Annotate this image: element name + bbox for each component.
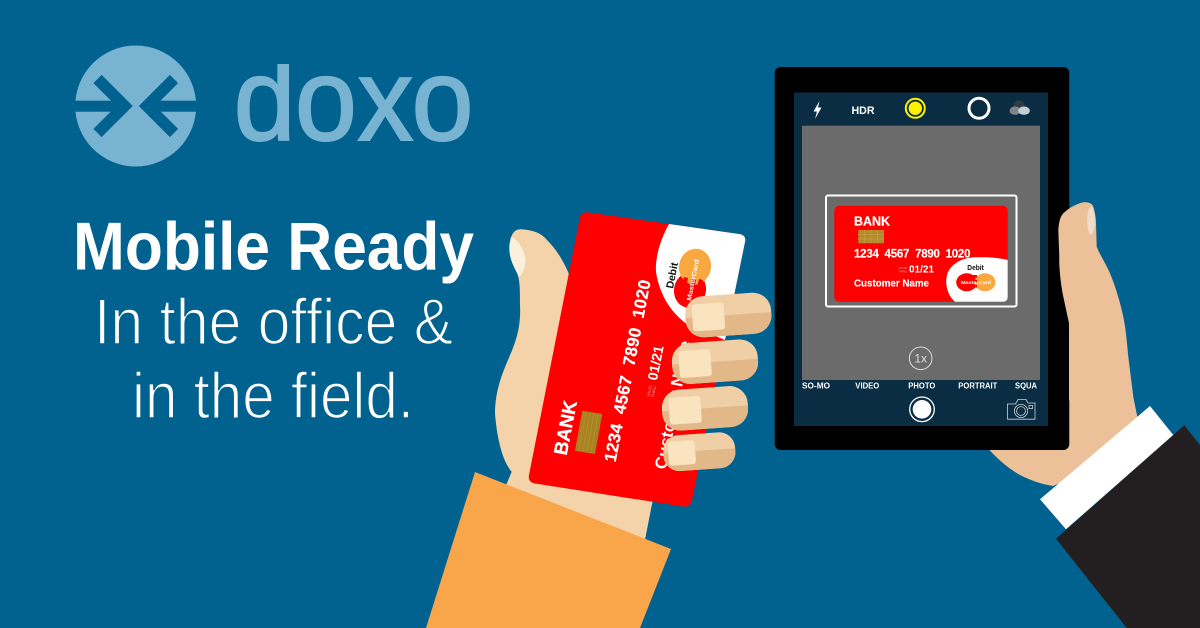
scanned card number: 1234 4567 7890 1020: [854, 248, 970, 260]
thumbnail: [509, 237, 526, 277]
icon: timer ring: [969, 98, 989, 118]
camera modes: SQUA: [1015, 381, 1037, 390]
white card corner: [656, 224, 745, 340]
icon: filters: [1010, 100, 1030, 115]
card body: [529, 212, 745, 507]
little finger: [662, 431, 736, 472]
chip: [575, 411, 602, 454]
scanned debit label: Debit: [967, 263, 984, 272]
doxo logo: [70, 35, 473, 166]
icon: flash: [814, 101, 822, 119]
tablet body: [775, 67, 1069, 450]
left hand holding card: [495, 229, 680, 545]
icon: camera: [1008, 400, 1035, 419]
camera viewfinder: [802, 126, 1040, 380]
fingers: [661, 292, 773, 472]
scan frame: [826, 196, 1016, 306]
debit label: Debit: [664, 261, 681, 290]
thumb shape: [1058, 202, 1137, 445]
expiry date: 01/21: [644, 344, 667, 382]
valid thru: VALID: [646, 385, 653, 397]
logo wordmark: doxo: [234, 35, 473, 166]
scanned valid thru: [898, 266, 908, 274]
camera modes: [802, 381, 1037, 390]
subheading line 1: In the office &: [94, 285, 453, 358]
scanned valid thru: THRU: [898, 270, 907, 274]
right thumb: [1058, 202, 1137, 445]
scanned network logo: [956, 273, 996, 291]
scanned chip: [858, 230, 884, 243]
scanned valid thru: VALID: [898, 266, 908, 270]
zoom indicator: 1x: [914, 352, 927, 366]
headline: Mobile Ready: [73, 208, 474, 284]
card network logo: [671, 246, 714, 311]
tablet screen: [794, 92, 1048, 426]
scanned expiry date: 01/21: [909, 265, 934, 276]
bank name: BANK: [551, 399, 582, 457]
valid thru: THRU: [650, 386, 657, 398]
customer name: Customer Name: [651, 339, 695, 471]
tablet: [775, 67, 1069, 450]
camera modes: VIDEO: [855, 381, 879, 390]
ring finger: [661, 385, 749, 432]
scanned card body: [834, 206, 1008, 302]
camera modes: PORTRAIT: [958, 381, 997, 390]
subheading line 2: in the field.: [132, 359, 414, 432]
camera modes: SO-MO: [802, 381, 830, 390]
tilted credit card: [529, 212, 745, 507]
scanned card: [834, 206, 1008, 302]
orange sleeve: [426, 472, 671, 628]
shutter button: [910, 397, 934, 422]
index finger: [684, 292, 773, 339]
camera modes: PHOTO: [908, 381, 935, 390]
dark suit sleeve: [1056, 425, 1200, 628]
scanned network logo: MasterCard: [961, 280, 991, 285]
thumbnail: [1087, 207, 1095, 235]
middle finger: [671, 338, 759, 386]
card number: 1234 4567 7890 1020: [601, 278, 655, 463]
right hand palm: [985, 300, 1150, 486]
card network logo: MasterCard: [686, 259, 701, 301]
valid thru: [646, 385, 657, 398]
logo mark: [70, 46, 201, 166]
palm and thumb: [495, 229, 680, 545]
scanned card white corner: [946, 257, 1008, 302]
HDR label: HDR: [852, 105, 875, 117]
scanned customer name: Customer Name: [854, 279, 929, 290]
white shirt cuff: [1040, 406, 1173, 529]
icon: yellow live button: [906, 99, 925, 118]
scanned bank name: BANK: [854, 214, 891, 229]
zoom indicator: [909, 347, 932, 370]
